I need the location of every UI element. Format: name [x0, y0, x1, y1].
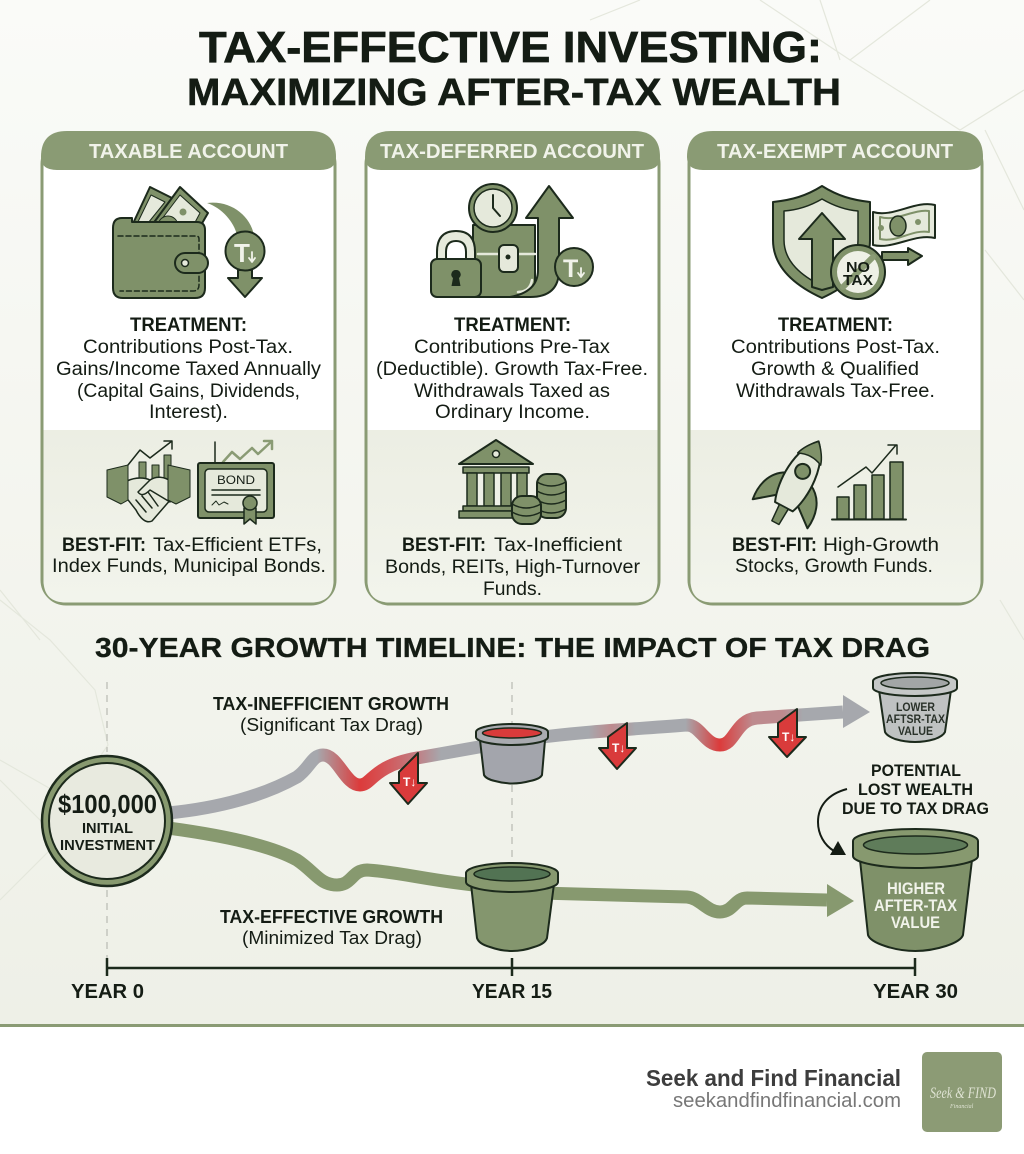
text: tax-deferred treatment — [376, 315, 648, 423]
icon: wallet with tax arrow: T — [234, 238, 250, 268]
text: tax-deferred treatment: Contributions Pre-Tax — [414, 337, 611, 358]
text: taxable treatment: Contributions Post-Tax. — [83, 337, 293, 358]
title: TAX-EFFECTIVE INVESTING: — [199, 23, 822, 72]
text: tax-exempt treatment — [731, 315, 940, 402]
icon: handshake with chart — [107, 441, 190, 522]
title: MAXIMIZING AFTER-TAX WEALTH — [187, 72, 841, 114]
heading: growth timeline: 30-YEAR GROWTH TIMELINE: THE IMPACT OF TAX DRAG — [95, 632, 930, 663]
text: tax-deferred best-fit — [385, 535, 641, 600]
text: taxable best-fit: BEST-FIT: — [62, 535, 146, 556]
arrow: tax-effective growth path — [168, 828, 854, 917]
icon: bond certificate: BOND — [217, 473, 255, 487]
icon: bank with coins — [459, 440, 566, 524]
footer brand text — [646, 1065, 901, 1112]
text: tax-deferred best-fit: Tax-Inefficient — [494, 535, 623, 556]
text: tax-deferred best-fit: Bonds, REITs, High-Turnover — [385, 557, 641, 578]
panel: tax-exempt account — [687, 131, 983, 604]
initial investment circle: $100,000 — [58, 789, 157, 819]
arrow: tax-inefficient growth path — [168, 695, 870, 813]
text: tax-exempt best-fit: Stocks, Growth Funds. — [735, 556, 933, 577]
text: taxable treatment: Gains/Income Taxed Annually — [56, 359, 322, 380]
footer — [0, 1024, 1024, 1154]
header: tax-deferred account: TAX-DEFERRED ACCOUNT — [380, 140, 644, 163]
icon: shield with no-tax badge: NO — [846, 260, 870, 276]
header: tax-exempt account: TAX-EXEMPT ACCOUNT — [717, 140, 953, 163]
text: taxable treatment: (Capital Gains, Dividends, — [77, 381, 300, 402]
text: tax-deferred best-fit: BEST-FIT: — [402, 535, 486, 556]
arrow: lost wealth pointer — [818, 789, 847, 855]
footer brand text: seekandfindfinancial.com — [673, 1090, 901, 1112]
footer logo: Financial — [949, 1104, 974, 1110]
bucket: year 30 higher after-tax value: HIGHER — [887, 879, 945, 898]
callout: potential lost wealth — [842, 761, 989, 818]
icon: shield with no-tax badge — [773, 186, 935, 299]
icon: lock, clock and growth arrow: T — [563, 255, 578, 283]
header: taxable account — [41, 131, 336, 170]
text: tax-deferred treatment: Withdrawals Taxed as — [414, 381, 610, 402]
bucket: year 15 green — [466, 863, 558, 951]
text: tax-exempt treatment: Contributions Post-Tax. — [731, 337, 940, 358]
text: taxable best-fit — [52, 535, 326, 577]
bucket: year 30 lower after-tax value: AFTSR-TAX — [886, 714, 945, 726]
text: taxable treatment: Interest). — [149, 402, 228, 423]
callout: potential lost wealth: LOST WEALTH — [858, 780, 973, 799]
bucket: year 15 gray — [476, 724, 548, 784]
text: tax-exempt best-fit — [732, 535, 939, 577]
text: taxable best-fit: Tax-Efficient ETFs, — [153, 535, 322, 556]
header: taxable account: TAXABLE ACCOUNT — [89, 140, 288, 163]
bucket: year 30 lower after-tax value — [873, 673, 957, 742]
bucket: year 30 higher after-tax value — [853, 829, 978, 951]
arrow: tax drag 2 — [599, 723, 636, 769]
label: tax-inefficient growth: (Significant Tax Drag) — [240, 715, 423, 735]
arrow: tax drag 3 — [769, 709, 806, 757]
timeline axis: YEAR 30 — [873, 981, 958, 1003]
text: taxable treatment — [56, 315, 322, 423]
timeline axis: YEAR 15 — [472, 981, 552, 1003]
bucket: year 30 lower after-tax value: LOWER — [896, 702, 936, 714]
bucket: year 30 higher after-tax value: VALUE — [891, 913, 940, 932]
arrow: tax drag 2: T↓ — [612, 741, 625, 755]
timeline axis: YEAR 0 — [71, 981, 144, 1003]
text: tax-exempt best-fit: BEST-FIT: — [732, 535, 817, 556]
callout: potential lost wealth: DUE TO TAX DRAG — [842, 799, 989, 818]
icon: lock, clock and growth arrow — [431, 184, 593, 297]
text: tax-deferred best-fit: Funds. — [483, 579, 542, 600]
arrow: tax drag 3: T↓ — [782, 730, 795, 744]
text: tax-deferred treatment: Ordinary Income. — [435, 402, 590, 423]
header: tax-deferred account — [365, 131, 660, 170]
footer brand text: Seek and Find Financial — [646, 1065, 901, 1091]
text: tax-deferred treatment: (Deductible). Growth Tax-Free. — [376, 359, 648, 380]
label: tax-inefficient growth: TAX-INEFFICIENT GROWTH — [213, 694, 449, 714]
text: tax-exempt best-fit: High-Growth — [823, 535, 939, 556]
icon: bond certificate — [198, 441, 274, 524]
text: tax-exempt treatment: Growth & Qualified — [751, 359, 919, 380]
timeline axis — [71, 958, 958, 1003]
bucket: year 30 higher after-tax value: AFTER-TAX — [874, 896, 958, 915]
label: tax-effective growth: TAX-EFFECTIVE GROWTH — [220, 907, 443, 927]
initial investment circle — [42, 756, 172, 886]
text: tax-exempt treatment: Withdrawals Tax-Free. — [736, 381, 935, 402]
label: tax-effective growth — [220, 907, 443, 948]
panel: tax-deferred account — [365, 131, 660, 604]
arrow: tax drag 1 — [390, 753, 427, 804]
text: tax-deferred treatment: TREATMENT: — [454, 315, 571, 336]
text: taxable treatment: TREATMENT: — [130, 315, 247, 336]
bucket: year 30 lower after-tax value: VALUE — [898, 726, 933, 738]
label: tax-inefficient growth — [213, 694, 449, 735]
text: tax-exempt treatment: TREATMENT: — [778, 315, 893, 336]
header: tax-exempt account — [687, 131, 983, 170]
footer logo: Seek & FIND — [930, 1085, 996, 1102]
icon: rocket — [748, 427, 846, 537]
initial investment circle: INVESTMENT — [60, 837, 155, 854]
initial investment circle: INITIAL — [82, 820, 133, 837]
title — [187, 23, 841, 114]
callout: potential lost wealth: POTENTIAL — [871, 761, 961, 780]
icon: shield with no-tax badge: TAX — [843, 273, 873, 289]
label: tax-effective growth: (Minimized Tax Drag) — [242, 928, 422, 948]
panel: taxable account — [41, 131, 336, 604]
arrow: tax drag 1: T↓ — [403, 775, 416, 789]
icon: rising bar chart — [832, 445, 906, 520]
text: taxable best-fit: Index Funds, Municipal Bonds. — [52, 556, 326, 577]
footer logo — [922, 1052, 1002, 1132]
icon: wallet with tax arrow — [113, 187, 264, 298]
